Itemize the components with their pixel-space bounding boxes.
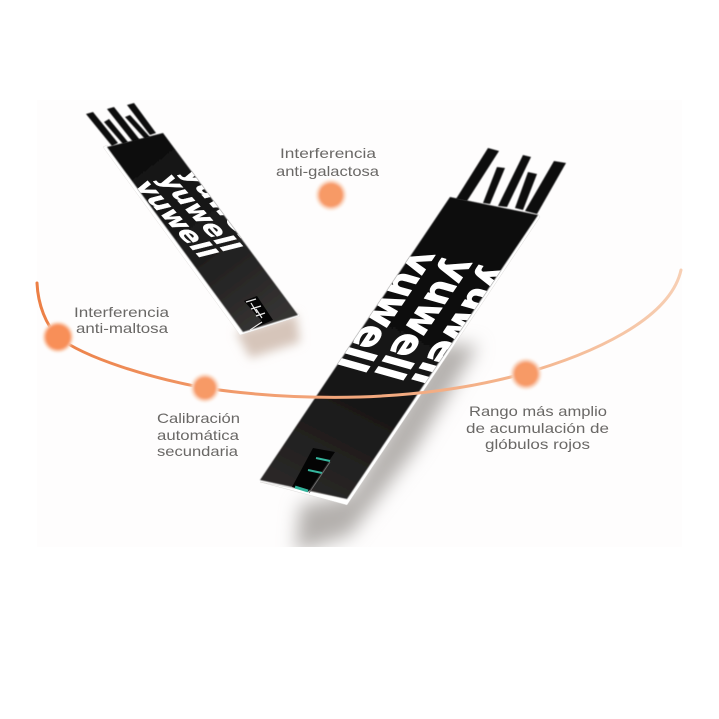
small strip sensor window [244,296,273,330]
large strip brand text: yuwell [363,254,486,384]
large strip brand text: yuwell [326,246,449,376]
label: calibracion: secundaria [157,443,238,459]
large strip white edge [260,214,540,505]
label: calibracion: automática [157,427,239,443]
orange arc [37,270,681,397]
label: rango: de acumulación de [466,420,609,436]
dot: anti-maltosa [43,322,73,352]
small test strip [86,103,300,335]
large strip sensor window [292,448,335,493]
label: anti-maltosa: anti-maltosa [76,320,168,336]
dot: anti-galactosa [316,180,346,210]
dot: calibracion [191,374,219,402]
shadows under strips [236,314,478,552]
large strip brand text: yuwell [400,261,523,391]
label: anti-maltosa: Interferencia [74,304,169,320]
small strip brand text: yuwell [174,166,272,248]
background card [37,100,682,547]
label: calibracion: Calibración [157,410,240,426]
label: rango: Rango más amplio [469,403,607,419]
large strip prongs [456,148,566,214]
small strip body [107,133,298,332]
label: anti-galactosa: Interferencia [280,145,376,161]
small strip brand text: yuwell [150,172,248,254]
small strip white edge [103,145,300,335]
large test strip [260,148,566,505]
small strip brand text: yuwell [126,178,224,260]
label: rango: glóbulos rojos [485,436,590,452]
dot: rango [511,359,541,389]
small strip prongs [86,103,156,146]
large strip body [260,197,538,499]
label: anti-galactosa: anti-galactosa [276,163,379,179]
